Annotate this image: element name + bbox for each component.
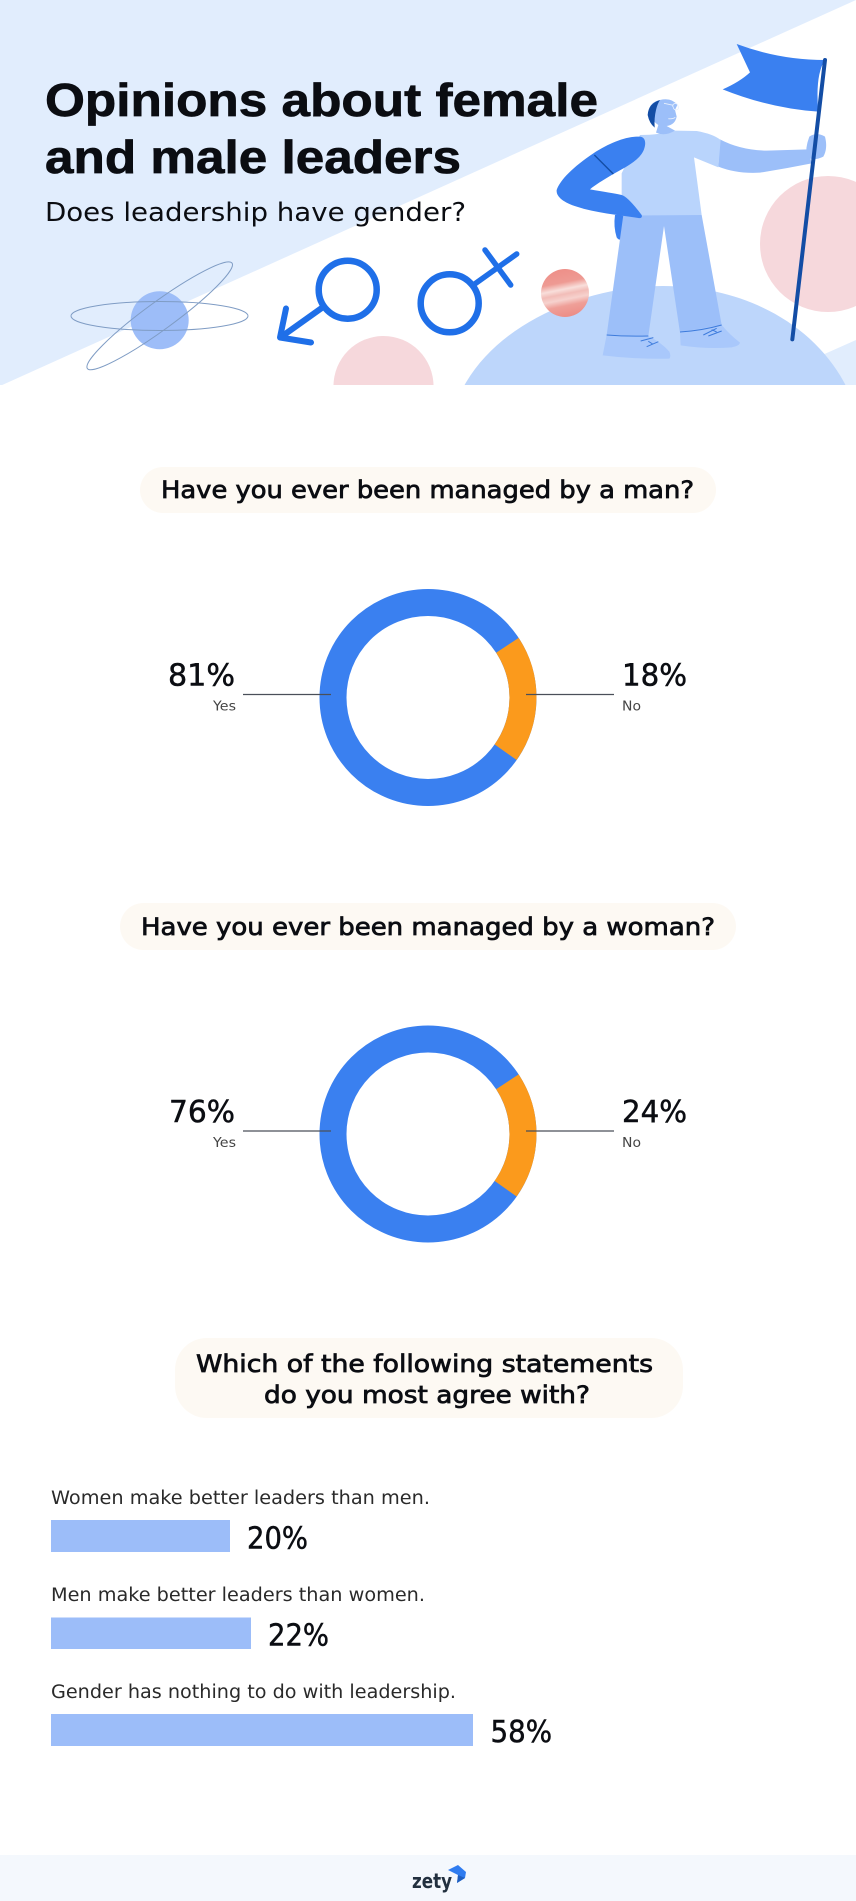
- bar: women better: Women make better leaders than men.: [51, 1488, 430, 1509]
- title: [45, 74, 598, 183]
- title: Opinions about female: [45, 74, 598, 126]
- bar: gender irrelevant: [51, 1682, 552, 1750]
- arm band: [594, 155, 613, 174]
- label: no: [622, 1095, 687, 1151]
- figure raised arm: [718, 139, 812, 173]
- bar: gender irrelevant: Gender has nothing to do with leadership.: [51, 1682, 456, 1703]
- bar: women better: 20%: [247, 1522, 308, 1556]
- panel: statements: [51, 1338, 683, 1750]
- icon: striped ball: [541, 269, 589, 317]
- figure hand behind hip: [614, 214, 624, 240]
- label: no: [622, 658, 687, 714]
- heading pill: [140, 467, 716, 513]
- figure shirt: [622, 131, 721, 216]
- subtitle: Does leadership have gender?: [45, 198, 466, 228]
- figure holding a flag: [557, 44, 826, 359]
- background diagonal: [0, 0, 856, 386]
- heading pill: [120, 903, 736, 950]
- figure bent arm: [557, 137, 645, 218]
- label: yes: 76%: [169, 1095, 235, 1130]
- footer band: [0, 1855, 856, 1901]
- bar: women better: [51, 1488, 430, 1556]
- leader lines: [243, 1130, 614, 1132]
- donut chart: [333, 602, 523, 792]
- heading pill: do you most agree with?: [264, 1381, 590, 1409]
- title: and male leaders: [45, 131, 461, 183]
- figure glasses and smile: [664, 103, 679, 119]
- logo wordmark: zety: [412, 1869, 452, 1893]
- pink semicircle: [334, 336, 434, 385]
- icon: logo flag: [448, 1865, 466, 1883]
- shoe details: [607, 325, 722, 347]
- figure right shoe: [680, 325, 740, 348]
- panel: managed by a woman: [120, 903, 736, 1229]
- heading pill: Which of the following statements: [196, 1350, 653, 1378]
- heading pill: Have you ever been managed by a man?: [161, 476, 694, 504]
- label: no: No: [622, 698, 641, 714]
- flag: [723, 44, 825, 112]
- heading pill: Have you ever been managed by a woman?: [141, 913, 715, 941]
- label: no: No: [622, 1135, 641, 1151]
- flag pole: [792, 60, 825, 339]
- label: no: 18%: [622, 658, 687, 694]
- icon: planet with orbits: [70, 261, 248, 370]
- corner triangle: [824, 340, 856, 385]
- label: yes: Yes: [212, 698, 236, 714]
- figure hair: [648, 100, 660, 128]
- leader lines: [243, 694, 614, 696]
- icon: female symbol: [421, 250, 517, 332]
- pink circle: [760, 176, 856, 312]
- heading pill: [175, 1338, 683, 1418]
- bar: men better: [51, 1585, 425, 1654]
- figure left shoe: [603, 335, 670, 359]
- label: yes: [169, 1095, 236, 1151]
- bar: gender irrelevant: 58%: [490, 1715, 552, 1750]
- label: no: 24%: [622, 1095, 687, 1130]
- label: yes: Yes: [212, 1135, 236, 1151]
- figure head and neck: [649, 99, 677, 134]
- panel: managed by a man: [140, 467, 716, 792]
- icon: male symbol: [280, 261, 377, 342]
- donut chart: [333, 1039, 523, 1229]
- label: yes: [168, 658, 236, 714]
- bar: men better: Men make better leaders than women.: [51, 1585, 425, 1606]
- hill: [464, 286, 846, 386]
- figure trousers: [607, 215, 722, 336]
- label: yes: 81%: [168, 658, 235, 694]
- bar: men better: 22%: [268, 1618, 329, 1654]
- figure hand: [806, 134, 826, 159]
- header illustration panel: [0, 0, 856, 385]
